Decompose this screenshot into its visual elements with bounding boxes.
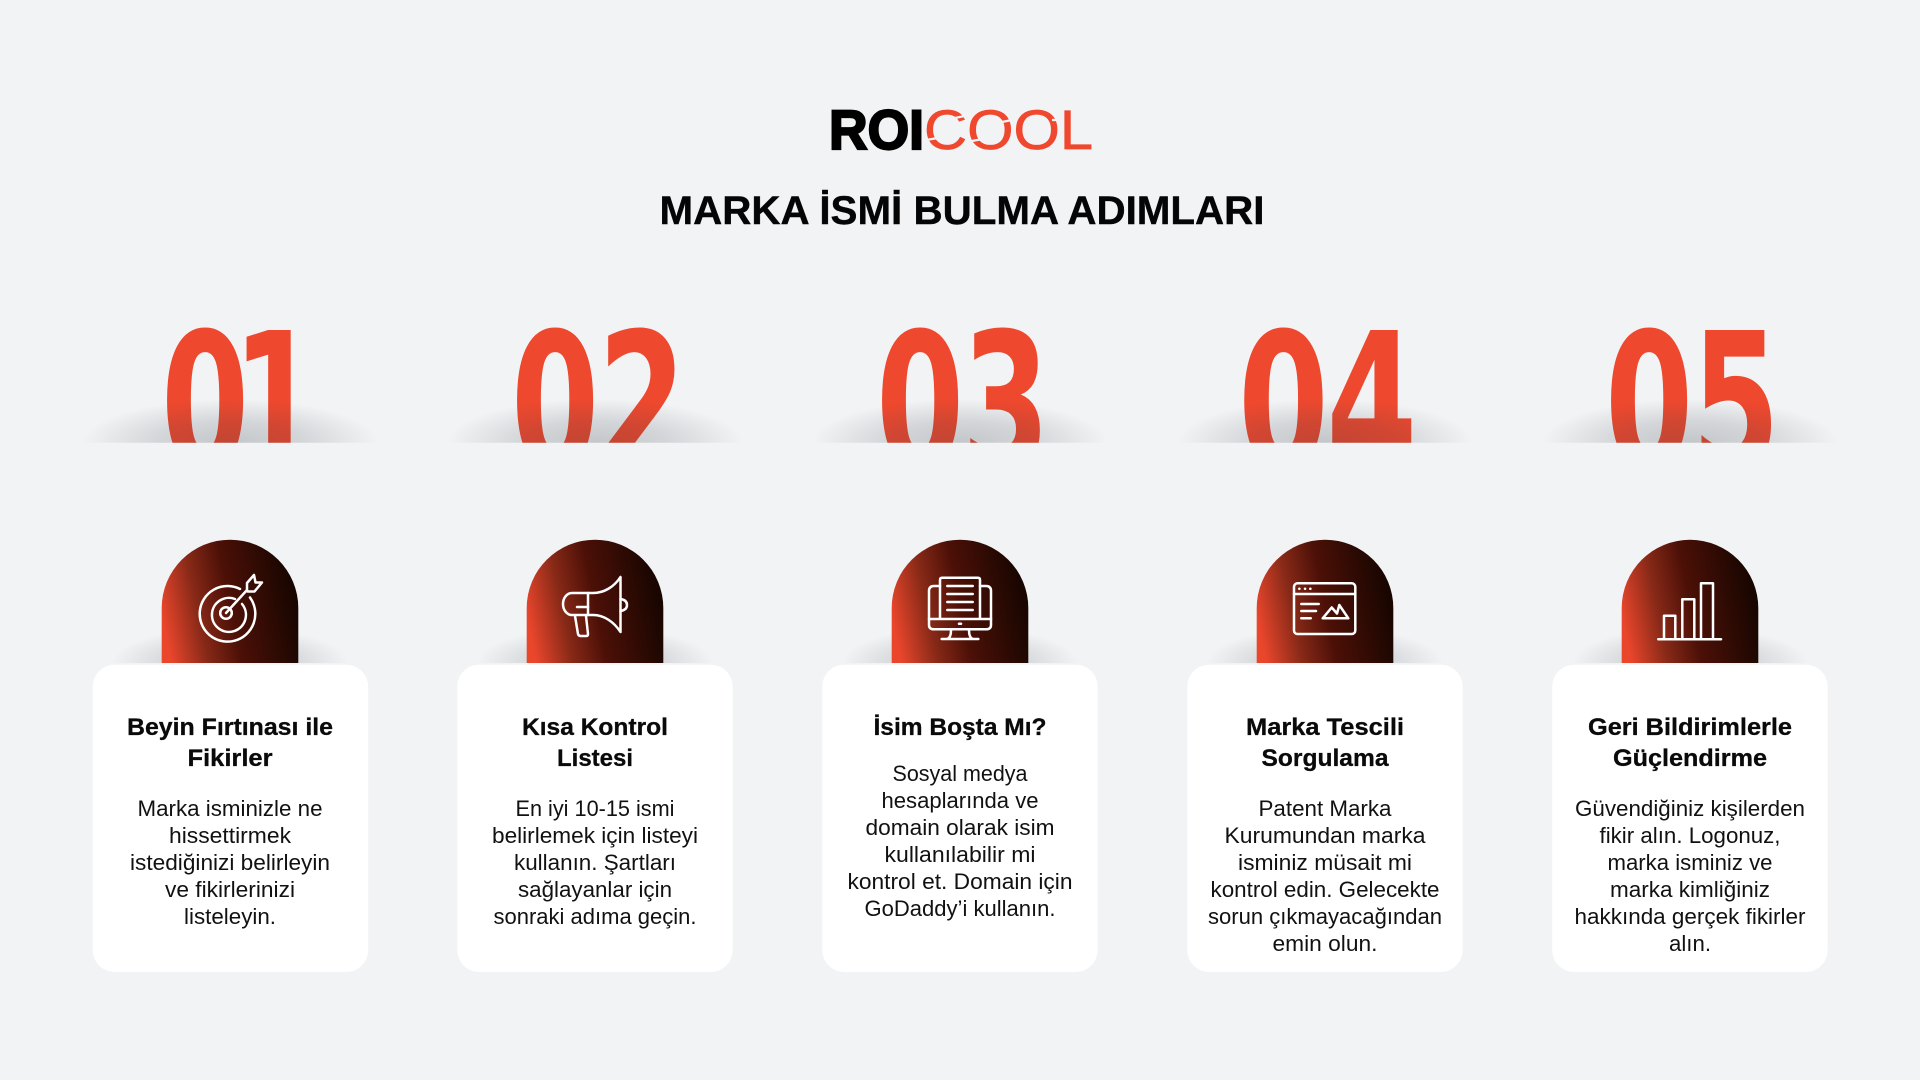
card 3 body (848, 761, 1072, 921)
number 02: 02 (511, 293, 686, 516)
card 4 heading: Sorgulama (1262, 745, 1389, 772)
card 5 heading (1588, 714, 1792, 772)
card 1 heading (127, 714, 333, 772)
card 2 body: sonraki adıma geçin. (494, 904, 696, 929)
icon: target and arrow (200, 575, 262, 642)
card 1 body: istediğinizi belirleyin (130, 850, 330, 875)
card 5 body: marka isminiz ve (1608, 850, 1772, 875)
card 5 body: alın. (1669, 931, 1711, 956)
card 2 body: kullanın. Şartları (514, 850, 676, 875)
step 5 icon tab: bar chart (1589, 540, 1792, 663)
card 1 body: listeleyin. (184, 904, 276, 929)
card 4 body: emin olun. (1272, 931, 1378, 956)
card 5 heading: Güçlendirme (1613, 745, 1767, 772)
icon: bar chart (1658, 583, 1721, 639)
card 4 body: Patent Marka (1258, 796, 1392, 821)
card 1 heading: Beyin Fırtınası ile (127, 714, 333, 741)
icon: megaphone (563, 577, 627, 636)
card 3 body: Sosyal medya (892, 761, 1028, 786)
number 01: 01 (161, 293, 320, 516)
card 4 body (1208, 796, 1442, 956)
card 1 body (130, 796, 330, 929)
number 05 (1563, 328, 1818, 443)
card 4 (1187, 665, 1463, 972)
icon: browser window with image (1294, 583, 1355, 634)
card 2 body: belirlemek için listeyi (492, 823, 698, 848)
card 4 body: sorun çıkmayacağından (1208, 904, 1442, 929)
card 3 body: GoDaddy’i kullanın. (864, 896, 1056, 921)
card 3 body: hesaplarında ve (882, 788, 1038, 813)
logo wordmark: COOL: COOL (924, 98, 1093, 161)
title: MARKA İSMİ BULMA ADIMLARI (660, 189, 1264, 233)
card 5 body: fikir alın. Logonuz, (1600, 823, 1780, 848)
card 1 (93, 665, 368, 972)
card 3 body: kullanılabilir mi (884, 842, 1036, 867)
logo (829, 98, 1093, 161)
logo wordmark: ROI: ROI (829, 98, 924, 161)
card 3 body: kontrol et. Domain için (848, 869, 1072, 894)
card 5 heading: Geri Bildirimlerle (1588, 714, 1792, 741)
card 3 body: domain olarak isim (866, 815, 1054, 840)
card 5 body: hakkında gerçek fikirler (1574, 904, 1806, 929)
card 5 body (1574, 796, 1806, 956)
card 3 (822, 665, 1098, 972)
card 5 body: marka kimliğiniz (1610, 877, 1770, 902)
card 5 (1552, 665, 1828, 972)
card 1 heading: Fikirler (188, 745, 273, 772)
card 2 heading (522, 714, 668, 772)
card 2 (457, 665, 733, 972)
number 04 (1198, 328, 1452, 443)
card 3 heading: İsim Boşta Mı? (874, 714, 1046, 741)
card 4 heading: Marka Tescili (1246, 714, 1404, 741)
step 1 icon tab: target (129, 540, 332, 663)
number 05: 05 (1605, 293, 1780, 516)
card 1 body: Marka isminizle ne (138, 796, 322, 821)
step 2 icon tab: megaphone (494, 540, 696, 663)
card 2 heading: Kısa Kontrol (522, 714, 668, 741)
card 5 body: Güvendiğiniz kişilerden (1575, 796, 1805, 821)
card 2 body: sağlayanlar için (518, 877, 672, 902)
card 1 body: ve fikirlerinizi (165, 877, 295, 902)
step 4 icon tab: browser window (1224, 540, 1426, 663)
card 2 heading: Listesi (557, 745, 633, 772)
card 2 body: En iyi 10-15 ismi (516, 796, 674, 821)
step 3 icon tab: monitor (859, 540, 1062, 663)
card 4 body: isminiz müsait mi (1238, 850, 1412, 875)
number 01 (103, 328, 358, 443)
card 1 body: hissettirmek (169, 823, 292, 848)
icon: monitor with document (929, 578, 991, 639)
card 4 body: kontrol edin. Gelecekte (1210, 877, 1440, 902)
card 4 heading (1246, 714, 1404, 772)
number 02 (468, 328, 722, 443)
number 03: 03 (876, 293, 1050, 516)
number 03 (833, 328, 1088, 443)
card 2 body (492, 796, 698, 929)
number 04: 04 (1238, 292, 1417, 516)
card 4 body: Kurumundan marka (1224, 823, 1426, 848)
